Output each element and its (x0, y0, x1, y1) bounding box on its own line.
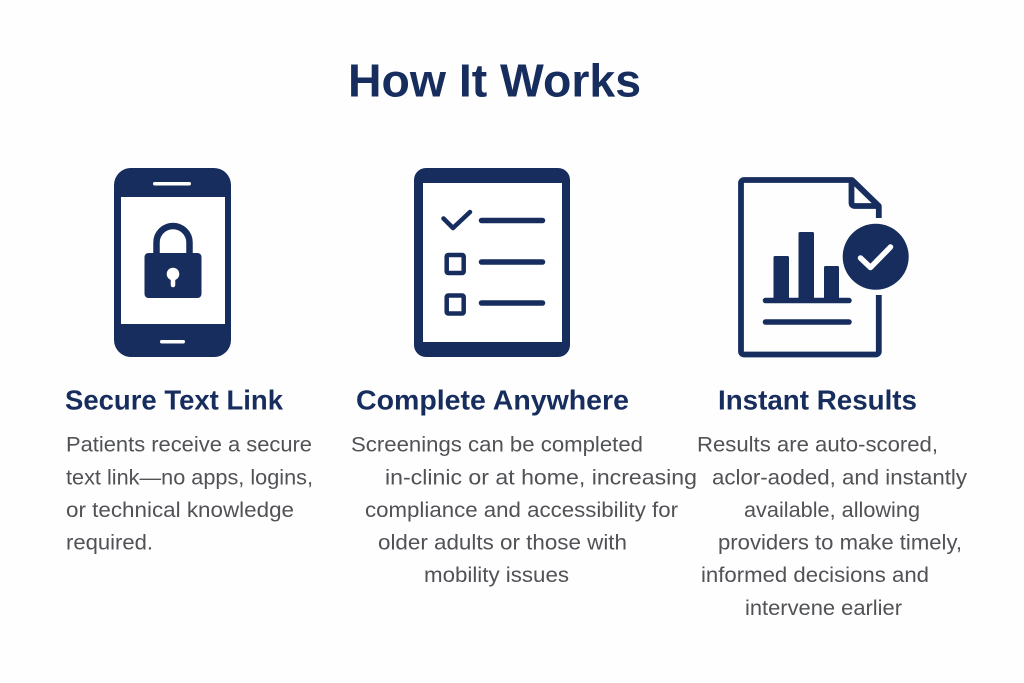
panel: complete anywhere (351, 168, 697, 587)
text block: secure text link description: Patients receive a secure (66, 433, 312, 457)
text block: instant results description: aclor-aoded, and instantly (712, 465, 967, 489)
title: How It Works (348, 55, 641, 107)
text block: instant results description (697, 433, 967, 620)
text block: instant results description: intervene earlier (745, 596, 902, 620)
panel: instant results (697, 180, 967, 620)
panel: secure text link (65, 168, 313, 554)
text block: instant results description: available, allowing (744, 498, 920, 522)
text block: instant results description: Results are auto-scored, (697, 433, 938, 457)
text block: complete anywhere description: Screenings can be completed (351, 433, 643, 457)
text block: complete anywhere description: compliance and accessibility for (365, 498, 678, 522)
heading: secure text link: Secure Text Link (65, 384, 284, 416)
text block: complete anywhere description: older adults or those with (378, 530, 627, 554)
icon: report with bar chart and check badge (741, 180, 909, 354)
icon: phone with padlock (114, 168, 231, 357)
text block: secure text link description: text link—no apps, logins, (66, 465, 313, 489)
icon: checklist (414, 168, 570, 357)
text block: secure text link description: required. (66, 530, 153, 554)
text block: instant results description: providers to make timely, (718, 530, 962, 554)
text block: complete anywhere description: mobility issues (424, 563, 569, 587)
heading: complete anywhere: Complete Anywhere (356, 384, 629, 416)
text block: complete anywhere description (351, 433, 697, 587)
text block: instant results description: informed decisions and (701, 563, 929, 587)
text block: complete anywhere description: in-clinic or at home, increasing (385, 465, 697, 489)
text block: secure text link description: or technical knowledge (66, 498, 294, 522)
text block: secure text link description (66, 433, 313, 554)
heading: instant results: Instant Results (718, 384, 917, 416)
